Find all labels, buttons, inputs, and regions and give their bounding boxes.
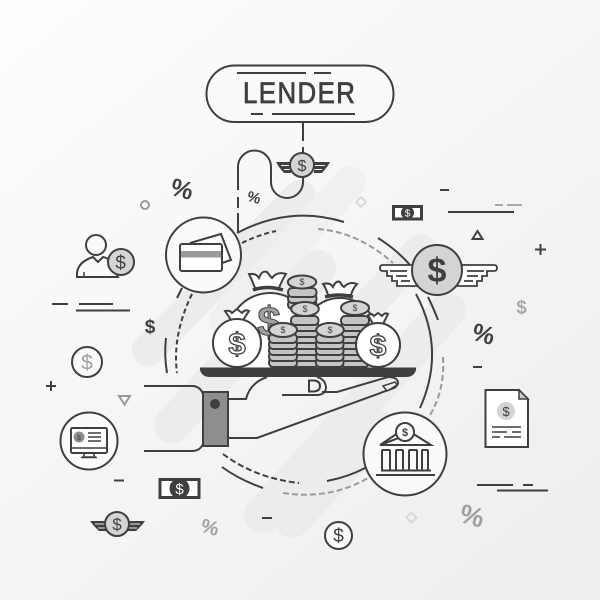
icon: bank circle (364, 412, 446, 496)
icon: coin bottom (325, 522, 352, 549)
icon: banknote bottom (160, 478, 199, 498)
coin stack dollar marks: $ (280, 325, 286, 335)
icon: small winged coin (276, 153, 330, 177)
money bag small right: $ (370, 330, 387, 363)
triangle gray (119, 396, 130, 404)
coin stack tall centre (291, 302, 319, 367)
gray dashed arcs (283, 229, 443, 495)
minus bottom left (114, 480, 124, 482)
coin stack dollar marks: $ (302, 304, 308, 314)
dollar left: $ (145, 317, 156, 338)
money bag large right (316, 280, 372, 324)
icon: bank circle: $ (402, 427, 408, 439)
icon: banknote top (394, 206, 422, 220)
coin stack dollar marks: $ (299, 277, 305, 287)
small gray circle (141, 201, 149, 209)
percent gray bottom: % (198, 515, 221, 541)
minus bottom centre (262, 517, 272, 519)
diamond gray (407, 513, 416, 522)
percent small: % (245, 188, 263, 208)
coin stack dollar marks (280, 277, 358, 335)
tray (200, 368, 416, 377)
icon: coin gray dollar: $ (81, 352, 93, 374)
minus (473, 366, 482, 368)
connector from title to tray (238, 122, 303, 233)
coin stack dollar marks: $ (327, 325, 333, 335)
icon: winged dollar coin (380, 245, 497, 295)
money pile (213, 272, 400, 377)
dollar gray: $ (516, 298, 527, 318)
plus left (46, 381, 56, 391)
money bag large left: $ (257, 298, 281, 345)
coin stack back (288, 276, 316, 309)
icon: document: $ (502, 404, 510, 419)
icon: banknote bottom: $ (175, 481, 184, 498)
coin stack front middle (316, 323, 344, 367)
diamond (356, 197, 366, 207)
icon: small winged coin: $ (298, 158, 307, 175)
left lines (52, 304, 130, 310)
title (206, 66, 394, 122)
plus (535, 244, 546, 255)
hand (144, 377, 398, 451)
icon: credit card circle (166, 218, 241, 292)
money bag small left (213, 309, 261, 367)
money bag small right (356, 313, 400, 367)
coin stack dollar marks: $ (352, 303, 358, 313)
icon: monitor circle (60, 412, 118, 470)
cuff button (210, 399, 220, 409)
bottom right lines (477, 485, 548, 490)
icon: coin bottom: $ (333, 526, 344, 547)
percent gray right: % (457, 498, 487, 534)
top right lines (440, 190, 514, 212)
icon: winged coin bottom (90, 512, 145, 536)
icon: person with coin: $ (115, 253, 126, 274)
top right gray lines (495, 204, 522, 206)
triangle (472, 231, 482, 239)
cuff (203, 392, 228, 446)
percent large: % (168, 173, 196, 206)
icon: person with coin (77, 235, 134, 277)
money bag large left (236, 270, 294, 367)
coin stack tall right (341, 301, 369, 367)
percent right: % (469, 318, 498, 351)
icon: winged dollar coin: $ (428, 252, 447, 290)
money bag small left: $ (228, 326, 246, 361)
ring arcs (165, 216, 438, 488)
sleeve (144, 386, 203, 451)
title: LENDER (243, 76, 356, 109)
icon: document (486, 390, 528, 447)
coin stack front left (269, 323, 297, 367)
background diagonal stripes (148, 182, 448, 522)
icon: coin gray dollar (72, 347, 102, 377)
icon: winged coin bottom: $ (112, 515, 122, 534)
icon: banknote top: $ (405, 208, 411, 220)
icon: monitor circle: $ (77, 435, 81, 442)
